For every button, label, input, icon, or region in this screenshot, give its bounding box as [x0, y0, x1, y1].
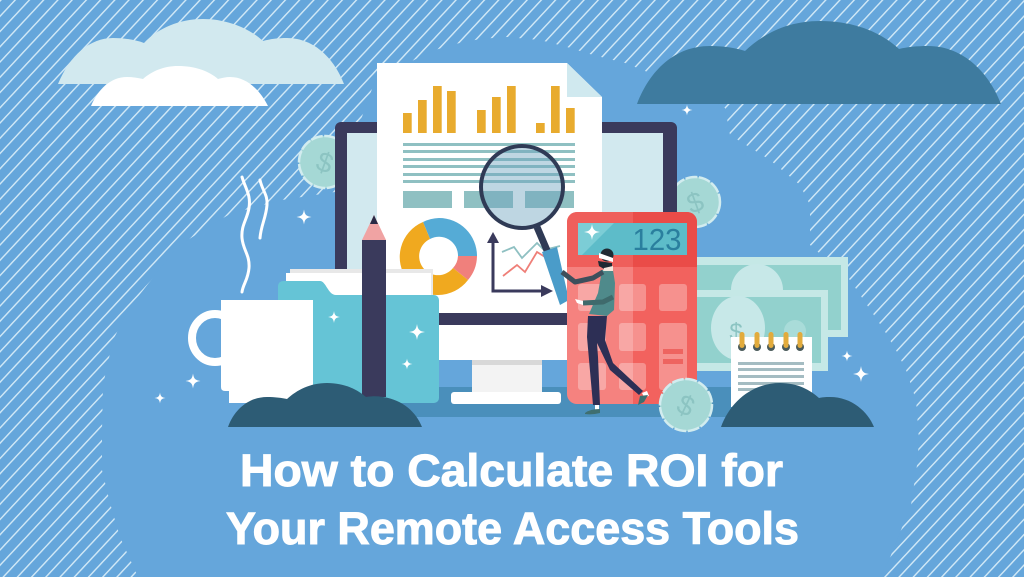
pencil: [362, 215, 386, 397]
monitor: [335, 122, 677, 404]
hill: left: [228, 383, 422, 427]
banknote: front: [690, 290, 828, 371]
folder: [278, 269, 439, 403]
text lines: [403, 143, 575, 208]
calculator: 123: [632, 222, 682, 257]
donut chart: [400, 218, 477, 295]
notepad: [731, 332, 812, 407]
coin: bottom: $: [672, 388, 700, 423]
coin: right: $: [683, 185, 708, 220]
bar charts: [403, 86, 575, 133]
title: How to Calculate ROI for: [240, 445, 783, 496]
coin: left: $: [312, 145, 338, 180]
steam: [242, 177, 249, 292]
title: [226, 445, 799, 554]
cloud: white: [91, 66, 268, 106]
magnifying glass: [481, 146, 569, 305]
coffee mug: [192, 177, 313, 403]
banknote: front: $: [729, 319, 743, 346]
sparkles: [154, 104, 869, 404]
solid blue blob: [102, 37, 919, 577]
cloud: dark: [637, 21, 1001, 104]
hill: right: [721, 383, 874, 427]
calculator: [567, 212, 697, 404]
title: Your Remote Access Tools: [226, 503, 799, 554]
cloud: light: [58, 19, 344, 84]
coin: bottom: [660, 379, 712, 431]
line chart: [487, 232, 560, 297]
display: [578, 223, 687, 255]
paper report: [377, 63, 602, 313]
person: [562, 248, 649, 414]
coin: left: [299, 136, 351, 188]
coin: right: [670, 177, 720, 227]
keys: [578, 284, 687, 390]
floor band: [400, 387, 740, 417]
banknote: back: [690, 257, 848, 337]
